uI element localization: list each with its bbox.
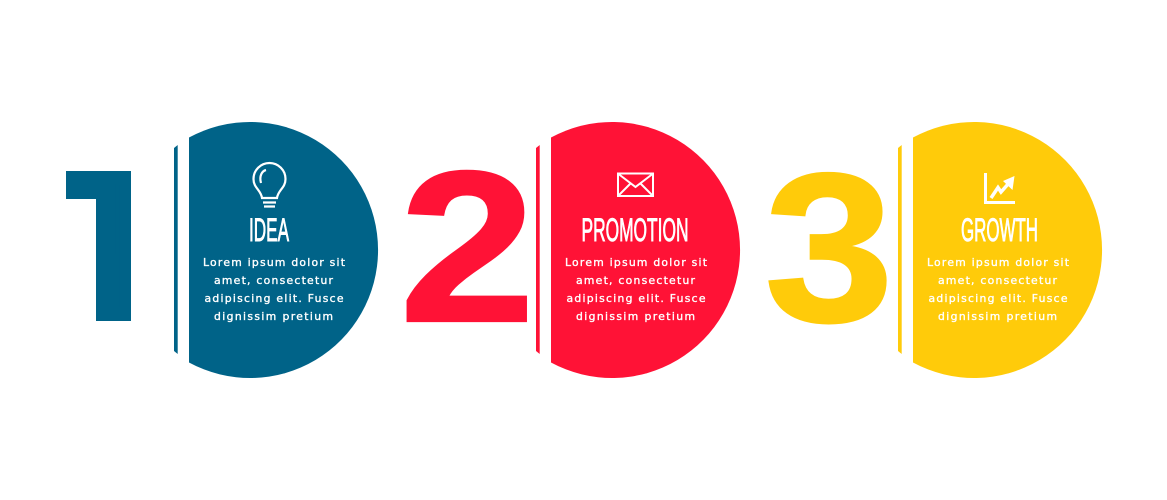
text block: promotion: Lorem ipsum dolor sit (565, 256, 707, 269)
text block: idea: adipiscing elit. Fusce (204, 292, 344, 305)
text block: idea: Lorem ipsum dolor sit (203, 256, 345, 269)
number 3: 3 (764, 130, 894, 367)
step 3 (764, 122, 1102, 378)
icon: growth chart (986, 173, 1015, 202)
side bar 3 (898, 145, 902, 354)
text block: growth: Lorem ipsum dolor sit (927, 256, 1069, 269)
heading: promotion: PROMOTION (582, 212, 688, 248)
side bar 1 (174, 145, 178, 354)
panel: growth (913, 122, 1102, 378)
heading: idea: IDEA (249, 212, 289, 248)
icon: envelope (618, 174, 653, 196)
text block: idea (203, 256, 345, 323)
step 1 (42, 122, 378, 378)
text block: promotion: amet, consectetur (576, 274, 696, 287)
icon: light bulb (254, 163, 286, 206)
side bar 2 (536, 145, 540, 354)
text block: idea: dignissim pretium (214, 310, 333, 323)
number 1: 1 (42, 124, 181, 367)
infographic (66, 122, 1102, 378)
text block: growth: dignissim pretium (938, 310, 1057, 323)
text block: growth: adipiscing elit. Fusce (928, 292, 1068, 305)
text block: promotion (565, 256, 707, 323)
text block: promotion: dignissim pretium (576, 310, 695, 323)
number 2: 2 (399, 126, 536, 367)
heading: growth: GROWTH (961, 212, 1038, 248)
text block: idea: amet, consectetur (214, 274, 334, 287)
step 2 (399, 122, 740, 378)
text block: growth (927, 256, 1069, 323)
text block: growth: amet, consectetur (938, 274, 1058, 287)
panel: promotion (551, 122, 740, 378)
text block: promotion: adipiscing elit. Fusce (566, 292, 706, 305)
number 1 (66, 171, 131, 321)
panel: idea (189, 122, 378, 378)
